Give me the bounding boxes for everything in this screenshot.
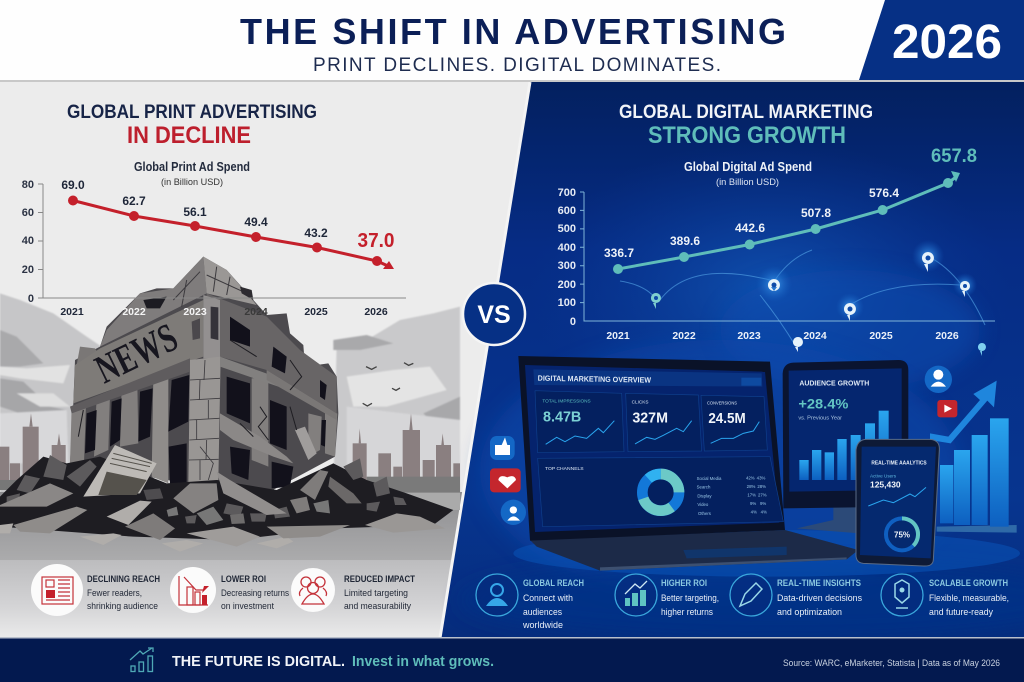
panel: digital growth background — [440, 82, 1024, 640]
y axis labels: 700 — [558, 187, 576, 199]
corner pier — [188, 357, 221, 483]
item: global reach: GLOBAL REACH — [523, 578, 584, 588]
source: Source: WARC, eMarketer, Statista | Data as of May 2026 — [783, 658, 1000, 669]
print benefits row — [31, 564, 415, 616]
item: lower ROI — [170, 567, 289, 613]
item: scalable growth: SCALABLE GROWTH — [929, 578, 1008, 588]
y axis labels — [22, 179, 34, 305]
item: lower ROI: Decreasing returns — [221, 588, 289, 599]
channel legend: Video — [697, 502, 709, 507]
KPI: impressions: 8.47B — [543, 408, 581, 425]
monitor: AUDIENCE GROWTH — [799, 380, 869, 387]
building mass — [70, 257, 338, 493]
item: global reach — [476, 574, 584, 631]
x axis labels: 2026 — [935, 330, 959, 342]
print heading: GLOBAL PRINT ADVERTISING — [67, 102, 317, 123]
platform glow — [513, 530, 1020, 577]
monitor: +28.4% — [798, 396, 849, 412]
KPI: conversions — [707, 400, 759, 443]
KPI: impressions: TOTAL IMPRESSIONS — [542, 399, 591, 404]
illustration: ruined news building — [0, 257, 460, 552]
x axis labels: 2025 — [869, 330, 893, 342]
y axis labels: 20 — [22, 264, 34, 276]
y axis labels: 100 — [558, 297, 576, 309]
y axis labels: 80 — [22, 179, 34, 191]
channel legend: Display — [697, 493, 712, 498]
item: global reach: worldwide — [522, 620, 563, 631]
print heading: IN DECLINE — [127, 122, 251, 149]
item: higher ROI: Better targeting, — [661, 593, 719, 604]
data labels: 442.6 — [735, 221, 765, 235]
chart: global print ad spend — [22, 160, 406, 318]
item: higher ROI — [615, 574, 719, 618]
news band — [73, 300, 203, 403]
data labels: 69.0 — [61, 178, 85, 192]
data labels: 62.7 — [122, 194, 146, 208]
subtitle: PRINT DECLINES. DIGITAL DOMINATES. — [313, 55, 721, 76]
channel legend: Search — [697, 485, 711, 490]
item: higher ROI: higher returns — [661, 607, 713, 618]
item: scalable growth — [881, 574, 1009, 618]
phone: REAL-TIME AAALYTICS — [871, 460, 927, 466]
chart: global digital ad spend — [558, 146, 995, 342]
growth line — [613, 171, 960, 274]
item: higher ROI: HIGHER ROI — [661, 578, 707, 588]
x axis labels: 2024 — [803, 330, 827, 342]
y axis labels: 500 — [558, 223, 576, 235]
print heading — [67, 102, 317, 149]
illustration: ruined news building: NEWS — [88, 314, 184, 392]
data labels — [604, 146, 977, 260]
data labels: 507.8 — [801, 206, 831, 220]
item: real-time insights: REAL-TIME INSIGHTS — [777, 578, 861, 588]
VS badge: VS — [477, 301, 511, 329]
chart title: Global Print Ad Spend — [134, 160, 250, 174]
x axis labels — [60, 306, 388, 318]
y axis labels: 0 — [28, 293, 34, 305]
map pins — [651, 240, 986, 356]
tagline — [172, 653, 494, 670]
data labels: 336.7 — [604, 246, 634, 260]
tagline: THE FUTURE IS DIGITAL. — [172, 653, 345, 670]
y axis labels: 60 — [22, 207, 34, 219]
y axis labels: 400 — [558, 242, 576, 254]
icon: growth bars — [130, 648, 153, 672]
rubble — [0, 457, 453, 540]
item: real-time insights: Data-driven decisions — [777, 593, 862, 604]
top channels donut: TOP CHANNELS — [545, 466, 584, 472]
x axis labels: 2022 — [122, 306, 146, 318]
footer bar — [0, 637, 1024, 682]
KPI: clicks — [632, 399, 692, 444]
phone: 125,430 — [870, 480, 901, 490]
y axis labels: 0 — [570, 316, 576, 328]
data labels: 389.6 — [670, 234, 700, 248]
year badge — [859, 0, 1024, 80]
monitor: vs. Previous Year — [798, 415, 842, 421]
y axis labels: 200 — [558, 279, 576, 291]
channel legend: 28% — [747, 484, 755, 489]
y axis labels — [558, 187, 576, 328]
item: global reach: Connect with — [523, 593, 573, 604]
y axis labels: 300 — [558, 260, 576, 272]
chart title: (in Billion USD) — [161, 177, 223, 188]
data labels: 576.4 — [869, 186, 899, 200]
KPI: conversions: 24.5M — [708, 411, 746, 427]
x axis labels: 2021 — [60, 306, 84, 318]
channel legend — [697, 475, 767, 516]
digital benefits row — [476, 574, 1009, 631]
skyline — [0, 413, 460, 493]
phone: 75% — [894, 530, 910, 539]
KPI: impressions — [542, 399, 614, 444]
chart title: Global Digital Ad Spend — [684, 160, 812, 174]
channel legend: 4% — [751, 509, 757, 514]
x axis labels — [606, 330, 959, 342]
chart title — [134, 160, 250, 188]
data labels: 37.0 — [358, 230, 394, 252]
y axis labels: 40 — [22, 235, 34, 247]
panel: print decline background — [0, 82, 540, 638]
data labels: 56.1 — [183, 205, 207, 219]
digital heading: STRONG GROWTH — [648, 122, 846, 149]
KPI: clicks: 327M — [632, 409, 668, 426]
VS badge — [463, 283, 525, 345]
digital heading — [619, 102, 873, 149]
right facade — [203, 293, 337, 413]
top channels donut — [545, 466, 679, 511]
digital heading: GLOBAL DIGITAL MARKETING — [619, 102, 873, 123]
channel legend: 28% — [757, 484, 766, 489]
item: global reach: audiences — [523, 607, 562, 618]
year badge: 2026 — [892, 16, 1002, 69]
birds — [363, 363, 413, 406]
item: lower ROI: LOWER ROI — [221, 574, 266, 584]
channel legend: 42% — [746, 475, 755, 480]
laptop: DIGITAL MARKETING OVERVIEW — [538, 374, 652, 385]
item: declining reach — [31, 564, 160, 616]
channel legend: 4% — [761, 509, 767, 514]
laptop — [518, 356, 858, 571]
x axis labels: 2023 — [183, 306, 207, 318]
channel legend: 17% — [747, 493, 756, 498]
x axis labels: 2024 — [244, 306, 268, 318]
channel legend: 9% — [760, 501, 766, 506]
x axis labels: 2021 — [606, 330, 630, 342]
chart title — [684, 160, 812, 188]
illustration: devices — [490, 356, 1020, 577]
KPI: conversions: CONVERSIONS — [707, 400, 737, 405]
phone: Active Users — [870, 473, 897, 478]
item: scalable growth: and future-ready — [929, 607, 993, 618]
x axis labels: 2022 — [672, 330, 696, 342]
item: declining reach: Fewer readers, — [87, 588, 142, 599]
item: declining reach: DECLINING REACH — [87, 574, 160, 584]
newspapers — [0, 445, 445, 552]
x axis labels: 2025 — [304, 306, 328, 318]
x axis labels: 2023 — [737, 330, 761, 342]
rocks — [7, 455, 407, 525]
item: reduced impact — [291, 568, 415, 612]
item: scalable growth: Flexible, measurable, — [929, 593, 1009, 604]
parapet — [100, 257, 207, 347]
data labels: 43.2 — [304, 226, 328, 240]
3D bars and arrow — [930, 381, 1017, 533]
KPI: clicks: CLICKS — [632, 399, 648, 404]
main title: THE SHIFT IN ADVERTISING — [240, 11, 786, 52]
monitor — [783, 360, 908, 533]
chart title: (in Billion USD) — [716, 177, 779, 188]
channel legend: 43% — [757, 475, 765, 480]
columns — [70, 373, 337, 483]
channel legend: Others — [698, 511, 711, 516]
social icons — [490, 366, 957, 525]
item: declining reach: shrinking audience — [87, 601, 158, 612]
channel legend: Social Media — [697, 476, 722, 481]
item: reduced impact: REDUCED IMPACT — [344, 574, 415, 584]
data labels: 657.8 — [931, 146, 977, 167]
data labels — [61, 178, 394, 252]
item: reduced impact: Limited targeting — [344, 588, 408, 599]
x axis labels: 2026 — [364, 306, 388, 318]
item: lower ROI: on investment — [221, 601, 274, 612]
decline line — [68, 196, 394, 269]
phone — [856, 439, 939, 566]
channel legend: 9% — [750, 501, 756, 506]
tagline: Invest in what grows. — [352, 653, 494, 670]
y axis labels: 600 — [558, 205, 576, 217]
item: reduced impact: and measurability — [344, 601, 411, 612]
header bar — [0, 0, 1024, 82]
dark openings — [85, 317, 327, 488]
item: real-time insights — [730, 574, 862, 618]
data labels: 49.4 — [244, 215, 268, 229]
item: real-time insights: and optimization — [777, 607, 842, 618]
channel legend: 27% — [758, 493, 767, 498]
